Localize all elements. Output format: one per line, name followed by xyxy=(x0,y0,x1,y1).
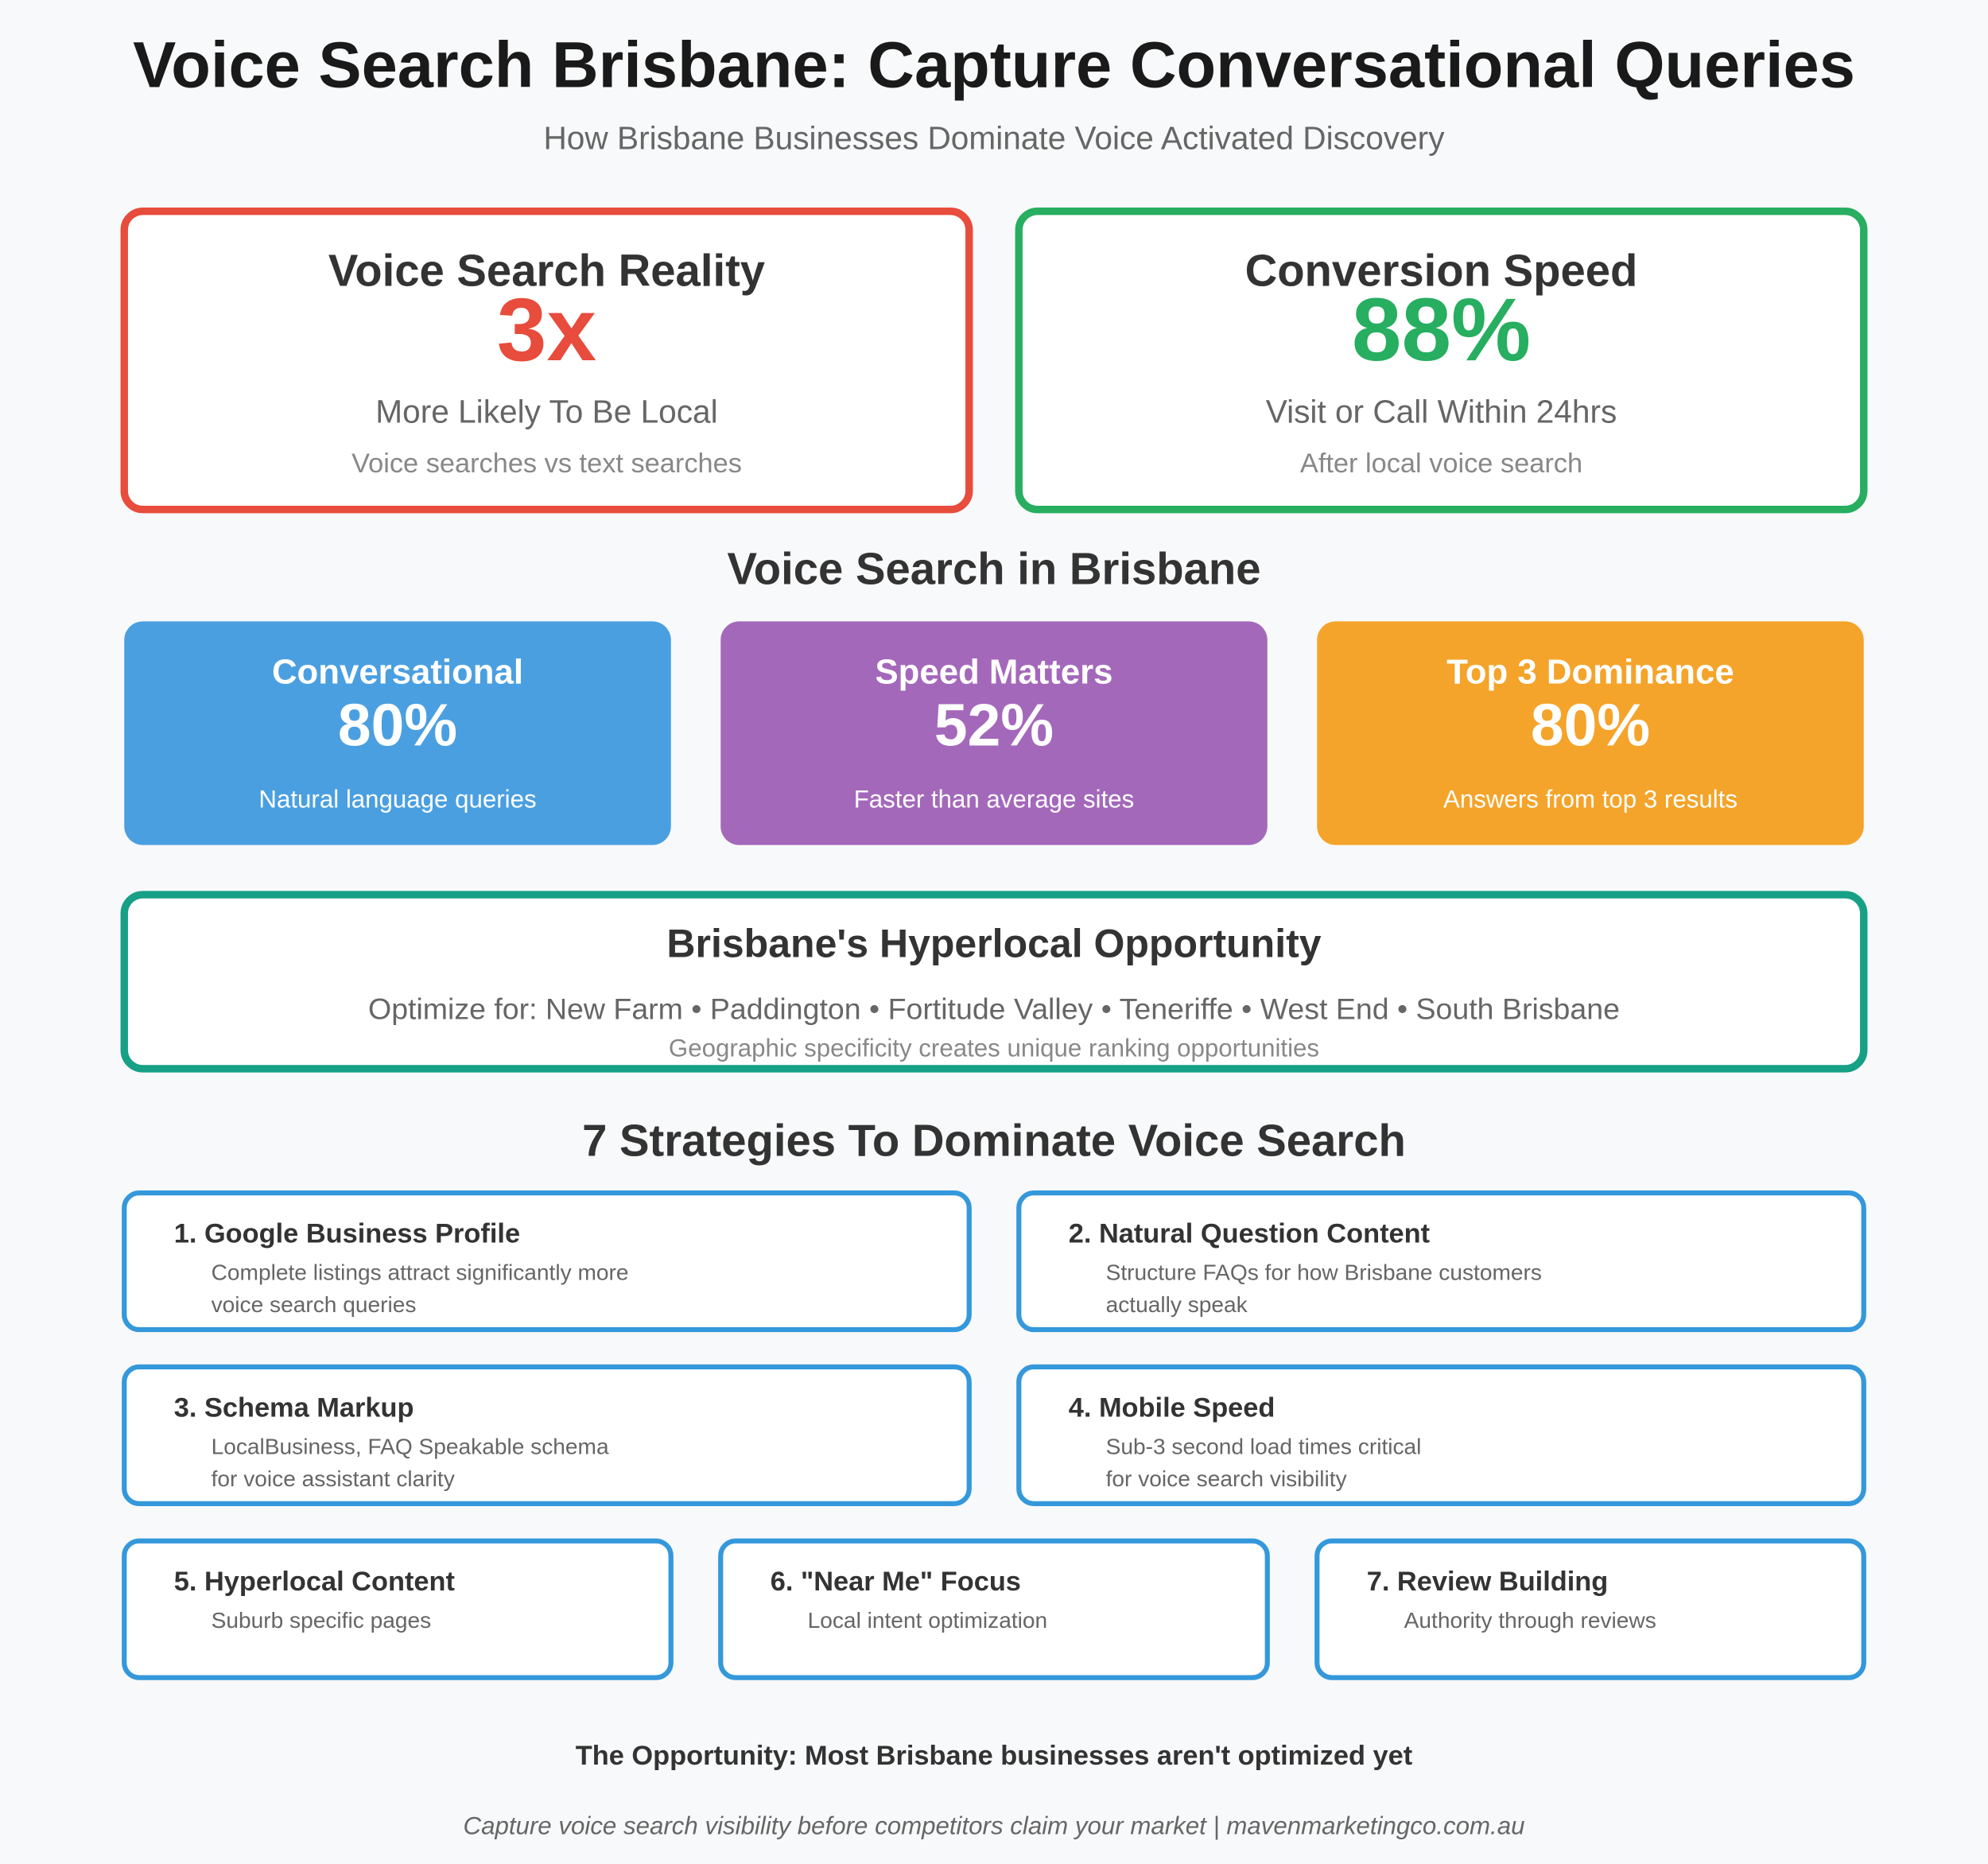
strategy 7: Authority through reviews xyxy=(1404,1608,1656,1633)
stat: 80%: 80% xyxy=(338,692,457,759)
section heading: 7 strategies: 7 Strategies To Dominate Voice Search xyxy=(582,1115,1406,1165)
big stat: 88%: 88% xyxy=(1352,279,1531,379)
strategy 2: 2. Natural Question Content xyxy=(1069,1219,1431,1249)
strategy 6: Local intent optimization xyxy=(808,1608,1047,1633)
strategy 5: Suburb specific pages xyxy=(212,1608,431,1633)
strategy 4: Sub-3 second load times critical xyxy=(1106,1434,1421,1458)
panel heading: Voice Search Reality xyxy=(328,245,765,295)
card note: Answers from top 3 results xyxy=(1443,786,1738,814)
card heading: Conversational xyxy=(272,652,523,691)
strategy 2: Structure FAQs for how Brisbane customers xyxy=(1106,1260,1542,1285)
strategy 5: 5. Hyperlocal Content xyxy=(174,1567,455,1597)
big stat: 3x: 3x xyxy=(497,279,596,379)
card note: Faster than average sites xyxy=(854,786,1134,814)
strategy 3 xyxy=(124,1367,969,1504)
strategy 5 xyxy=(124,1541,671,1678)
card note: Natural language queries xyxy=(258,786,537,814)
title: Voice Search Brisbane: Capture Conversational Queries xyxy=(133,29,1855,101)
panel heading: Conversion Speed xyxy=(1245,245,1637,295)
strategy 3: 3. Schema Markup xyxy=(174,1392,414,1423)
panel: speed matters xyxy=(720,621,1268,845)
strategy 6 xyxy=(720,1541,1268,1678)
panel: voice search reality xyxy=(124,212,969,510)
strategy 7 xyxy=(1317,1541,1864,1678)
strategy 2: actually speak xyxy=(1106,1292,1248,1317)
panel: hyperlocal opportunity xyxy=(124,895,1864,1069)
strategy 1: 1. Google Business Profile xyxy=(174,1219,520,1249)
panel note: Geographic specificity creates unique ranking opportunities xyxy=(669,1034,1319,1062)
stat: 52%: 52% xyxy=(934,692,1054,759)
strategy 4: for voice search visibility xyxy=(1106,1466,1347,1491)
card heading: Top 3 Dominance xyxy=(1446,652,1734,691)
strategy 1: Complete listings attract significantly more xyxy=(212,1260,629,1285)
strategy 3: LocalBusiness, FAQ Speakable schema xyxy=(212,1434,609,1458)
strategy 1 xyxy=(124,1193,969,1330)
panel: conversational xyxy=(124,621,671,845)
stat note: Voice searches vs text searches xyxy=(351,449,742,479)
stat label: More Likely To Be Local xyxy=(375,393,718,429)
strategy 6: 6. "Near Me" Focus xyxy=(771,1567,1021,1597)
stat note: After local voice search xyxy=(1300,449,1582,479)
suburb list: Optimize for: New Farm • Paddington • Fortitude Valley • Teneriffe • West End • South Brisbane xyxy=(368,992,1620,1025)
strategy 1: voice search queries xyxy=(212,1292,416,1317)
strategy 7: 7. Review Building xyxy=(1367,1567,1608,1597)
subtitle: How Brisbane Businesses Dominate Voice Activated Discovery xyxy=(543,120,1445,157)
strategy 4: 4. Mobile Speed xyxy=(1069,1392,1275,1423)
panel: conversion speed xyxy=(1019,212,1864,510)
card heading: Speed Matters xyxy=(875,652,1113,691)
strategy 3: for voice assistant clarity xyxy=(212,1466,455,1491)
strategy 2 xyxy=(1019,1193,1864,1330)
stat label: Visit or Call Within 24hrs xyxy=(1266,393,1617,429)
panel heading: Brisbane's Hyperlocal Opportunity xyxy=(666,921,1322,965)
stat: 80%: 80% xyxy=(1531,692,1650,759)
footer: Capture voice search visibility before competitors claim your market | mavenmarketingco.com.au xyxy=(464,1812,1524,1839)
opportunity statement: The Opportunity: Most Brisbane businesses aren't optimized yet xyxy=(576,1741,1413,1771)
section heading: voice search in brisbane: Voice Search in Brisbane xyxy=(727,543,1261,593)
panel: top 3 dominance xyxy=(1317,621,1864,845)
strategy 4 xyxy=(1019,1367,1864,1504)
